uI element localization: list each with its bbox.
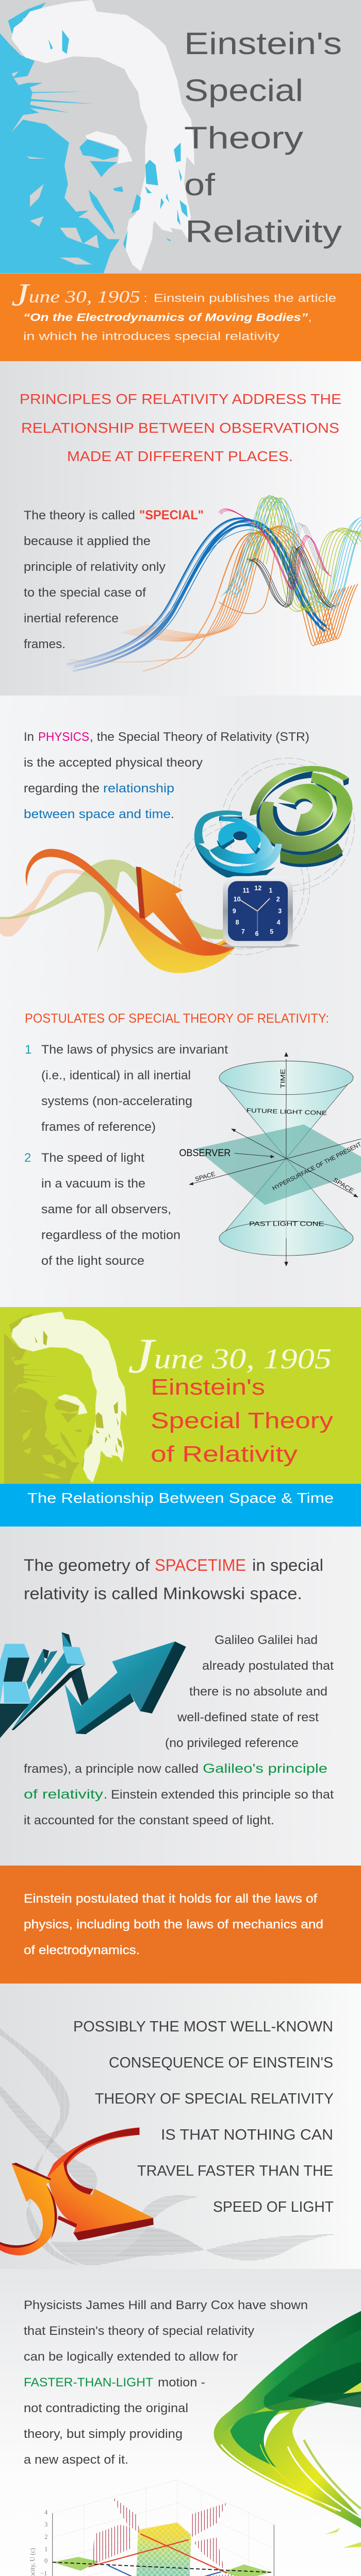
axis labels: 1 — [44, 2546, 47, 2553]
text: faster than light motion: motion - — [158, 2376, 205, 2389]
text: faster than light — [73, 2019, 334, 2215]
heading: Einstein's — [151, 1375, 265, 1400]
axis labels: 3 — [44, 2521, 47, 2528]
text: Galileo: Galileo's principle — [203, 1761, 327, 1776]
text: why special: because it applied the — [24, 534, 151, 548]
callout: orange postulate: of electrodynamics. — [24, 1943, 140, 1957]
panel: publication date banner — [0, 274, 361, 361]
title: of — [184, 167, 215, 202]
text: faster than light motion: theory, but simply providing — [24, 2427, 183, 2441]
illustration: green portrait — [4, 1312, 126, 1484]
axes — [53, 2513, 274, 2576]
chart: 3D velocity surface — [29, 2480, 281, 2576]
text: physics definition: between space and time — [24, 807, 171, 821]
publication text: : — [144, 292, 147, 304]
clock: 6 — [255, 930, 259, 938]
text: Galileo: Galileo Galilei had — [215, 1633, 318, 1647]
text: spacetime geometry: The geometry of — [24, 1556, 150, 1574]
lines — [89, 2534, 227, 2573]
publication text — [23, 292, 336, 343]
text: why special: The theory is called — [24, 509, 135, 522]
callout: orange postulate — [0, 1866, 361, 1984]
text: Galileo: of relativity — [24, 1787, 104, 1802]
text: postulate 2: in a vacuum is the — [41, 1177, 145, 1191]
text: physics definition: In — [24, 730, 34, 744]
text: postulate 2: regardless of the motion — [41, 1228, 180, 1242]
panel: physics and postulates — [0, 696, 361, 1307]
illustration: zig-zag arrow — [0, 1632, 186, 1738]
text: spacetime geometry: SPACETIME — [155, 1556, 246, 1574]
clock: 1 — [269, 887, 272, 894]
panel: spacetime — [0, 1527, 361, 1866]
label: space left: SPACE — [194, 1171, 216, 1183]
axis labels: 0 — [44, 2557, 47, 2565]
grid — [53, 2480, 274, 2576]
text: Galileo: . Einstein extended this principle so that — [104, 1788, 334, 1802]
text: spacetime geometry: relativity is called Minkowski space. — [24, 1584, 302, 1603]
text: faster than light: TRAVEL FASTER THAN THE — [137, 2163, 333, 2179]
label: future light cone: FUTURE LIGHT CONE — [246, 1107, 327, 1116]
text: postulate 1: frames of reference) — [41, 1120, 156, 1134]
heading — [20, 391, 341, 464]
callout: orange postulate: physics, including both the laws of mechanics and — [24, 1918, 323, 1931]
title — [184, 26, 342, 249]
text: physics definition: is the accepted physical theory — [24, 756, 203, 770]
label: observer: OBSERVER — [179, 1147, 231, 1159]
text: physics definition: relationship — [103, 782, 174, 795]
text: physics definition: PHYSICS — [38, 730, 89, 744]
illustration: green swoosh — [214, 2311, 361, 2548]
blue disc — [194, 810, 282, 877]
date: une 30, 1905 — [29, 287, 140, 307]
clock: 8 — [236, 919, 239, 926]
date: une 30, 1905 — [154, 1343, 332, 1375]
heading: MADE AT DIFFERENT PLACES. — [67, 448, 293, 464]
axis labels — [29, 2509, 281, 2576]
illustration: Einstein portrait — [0, 0, 194, 273]
text: faster than light: POSSIBLY THE MOST WELL-KNOWN — [73, 2019, 333, 2035]
text: postulate 1: The laws of physics are invariant — [41, 1043, 228, 1057]
panel: Hill and Cox — [0, 2269, 361, 2576]
text: postulate 1: (i.e., identical) in all inertial — [41, 1069, 191, 1082]
date: J — [128, 1328, 157, 1383]
text: why special — [24, 508, 204, 651]
panel: title header — [0, 0, 361, 274]
title: Einstein's — [184, 26, 342, 61]
clock: 3 — [278, 907, 282, 914]
text: Galileo — [24, 1633, 334, 1827]
text: postulate 2: of the light source — [41, 1254, 144, 1268]
text: faster than light motion: can be logically extended to allow for — [24, 2350, 238, 2364]
text: postulate 2: The speed of light — [41, 1151, 144, 1165]
clock: 10 — [234, 896, 241, 903]
text: Galileo: well-defined state of rest — [177, 1710, 319, 1724]
heading: of Relativity — [151, 1442, 298, 1467]
heading — [151, 1375, 333, 1467]
clock: 12 — [254, 885, 261, 892]
text: Galileo: there is no absolute and — [189, 1685, 327, 1699]
text: postulate 2: 2 — [24, 1151, 31, 1165]
text: Galileo: (no privileged reference — [165, 1736, 299, 1750]
text: why special: frames. — [24, 637, 65, 651]
text: postulate 1 — [25, 1043, 228, 1134]
text: why special: to the special case of — [24, 586, 146, 600]
clock: 5 — [270, 928, 273, 936]
heading: Special Theory — [151, 1408, 333, 1433]
text: postulate 2: same for all observers, — [41, 1202, 171, 1216]
publication text: Einstein publishes the article — [154, 292, 336, 304]
illustration: ribbons, arrow, discs and clock — [0, 758, 355, 973]
text: faster than light motion: Physicists James Hill and Barry Cox have shown — [24, 2298, 308, 2312]
clock: 2 — [276, 896, 280, 903]
title: Special — [184, 73, 303, 108]
label: past light cone: PAST LIGHT CONE — [249, 1221, 324, 1227]
text: postulate 2 — [24, 1151, 180, 1268]
wings — [53, 2557, 271, 2576]
blue panels — [99, 2574, 233, 2576]
central mesh — [136, 2522, 205, 2576]
title: Theory — [184, 121, 303, 155]
text: why special: principle of relativity only — [24, 560, 166, 574]
text: faster than light: CONSEQUENCE OF EINSTEIN'S — [109, 2055, 333, 2071]
text: Galileo: it accounted for the constant speed of light. — [24, 1814, 274, 1827]
text: postulate 1: 1 — [25, 1043, 31, 1057]
text: physics definition — [24, 730, 309, 821]
callout: orange postulate: Einstein postulated that it holds for all the laws of — [24, 1892, 317, 1906]
axis label: time: TIME — [280, 1069, 287, 1089]
clock: 9 — [233, 907, 236, 914]
text: spacetime geometry — [24, 1556, 323, 1603]
panel: principles of relativity — [0, 361, 361, 696]
heading: RELATIONSHIP BETWEEN OBSERVATIONS — [21, 420, 339, 436]
red panels — [92, 2497, 227, 2570]
clock: 11 — [243, 887, 250, 894]
illustration: red and orange curved arrows — [0, 2127, 154, 2256]
publication text: , — [308, 312, 311, 324]
publication text: in which he introduces special relativity — [23, 330, 280, 343]
clock: 7 — [241, 928, 245, 936]
banner: space and time: The Relationship Between Space & Time — [27, 1490, 334, 1506]
label: space right: SPACE — [332, 1176, 355, 1194]
publication text: “On the Electrodynamics of Moving Bodies” — [23, 312, 308, 324]
text: physics definition: . — [171, 807, 174, 821]
text: faster than light motion — [24, 2298, 308, 2467]
text: physics definition: , the Special Theory of Relativity (STR) — [90, 730, 309, 744]
axis labels: 4 — [44, 2509, 48, 2516]
text: faster than light motion: that Einstein's theory of special relativity — [24, 2324, 254, 2338]
text: faster than light: IS THAT NOTHING CAN — [161, 2127, 333, 2143]
diagram: light cone — [179, 1052, 361, 1266]
faint arrow rings — [174, 758, 355, 955]
text: faster than light motion: FASTER-THAN-LIGHT — [24, 2376, 153, 2389]
chart: colourful wave bundles — [67, 495, 361, 671]
clock — [221, 876, 299, 948]
text: faster than light: THEORY OF SPECIAL RELATIVITY — [95, 2091, 334, 2107]
panel: green header — [0, 1307, 361, 1484]
axis labels: 2 — [44, 2533, 47, 2540]
title: Relativity — [185, 214, 342, 249]
panel: faster than light statement — [0, 1984, 361, 2269]
text: faster than light motion: a new aspect of it. — [24, 2453, 128, 2467]
heading: PRINCIPLES OF RELATIVITY ADDRESS THE — [20, 391, 341, 407]
text: why special: "SPECIAL" — [139, 508, 204, 522]
text: faster than light motion: not contradicting the original — [24, 2401, 188, 2415]
illustration: grey line wave — [0, 2028, 337, 2265]
clock: 4 — [277, 919, 281, 926]
date: J — [11, 278, 30, 313]
banner: space and time — [0, 1484, 361, 1527]
heading: postulates: POSTULATES OF SPECIAL THEORY OF RELATIVITY: — [25, 1011, 329, 1026]
text: postulate 1: systems (non-accelerating — [41, 1094, 192, 1108]
text: faster than light: SPEED OF LIGHT — [213, 2199, 334, 2215]
green disc — [250, 766, 352, 867]
text: Galileo: already postulated that — [202, 1659, 334, 1673]
text: physics definition: regarding the — [24, 782, 100, 795]
text: why special: inertial reference — [24, 612, 119, 625]
text: spacetime geometry: in special — [252, 1556, 323, 1574]
text: Galileo: frames), a principle now called — [24, 1762, 199, 1776]
